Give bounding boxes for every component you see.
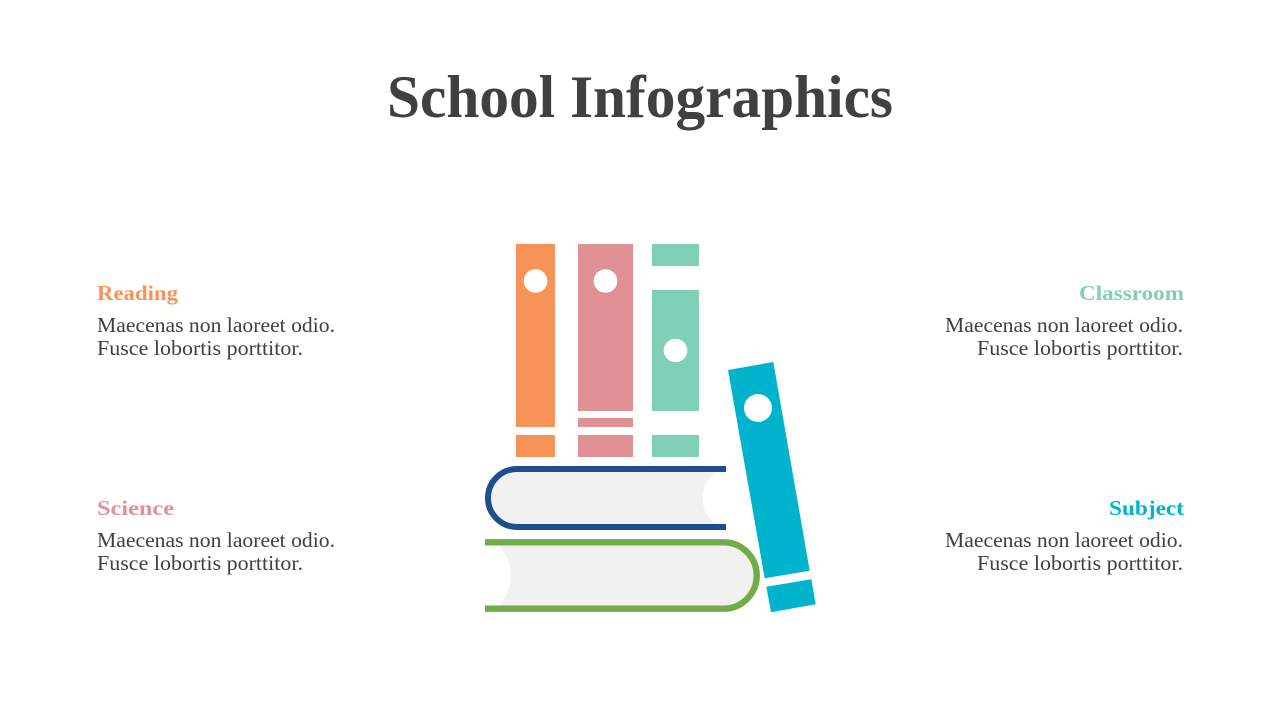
icon: orange upright book: [516, 244, 555, 457]
body: science: [97, 528, 335, 575]
body: reading: Fusce lobortis porttitor.: [97, 336, 303, 360]
body: reading: [97, 313, 335, 360]
heading: classroom: Classroom: [1079, 281, 1185, 305]
body: classroom: Fusce lobortis porttitor.: [977, 336, 1183, 360]
body: science: Maecenas non laoreet odio.: [97, 528, 335, 552]
body: classroom: [945, 313, 1183, 360]
heading: reading: Reading: [97, 281, 179, 305]
heading: science: Science: [97, 496, 174, 520]
body: subject: Fusce lobortis porttitor.: [977, 551, 1183, 575]
text block: classroom: [945, 281, 1185, 360]
body: subject: [945, 528, 1183, 575]
body: reading: Maecenas non laoreet odio.: [97, 313, 335, 337]
text block: subject: [945, 496, 1184, 575]
text block: science: [97, 496, 335, 575]
illustration: stack of books: [485, 244, 816, 612]
heading: subject: Subject: [1109, 496, 1184, 520]
icon: green lying book: [485, 542, 757, 609]
icon: mint upright book: [652, 244, 699, 457]
title: School Infographics: [387, 64, 893, 130]
icon: pink upright book: [578, 244, 633, 457]
text block: reading: [97, 281, 335, 360]
icon: blue lying book: [488, 469, 726, 527]
body: science: Fusce lobortis porttitor.: [97, 551, 303, 575]
body: classroom: Maecenas non laoreet odio.: [945, 313, 1183, 337]
icon: teal leaning book: [728, 362, 816, 612]
body: subject: Maecenas non laoreet odio.: [945, 528, 1183, 552]
